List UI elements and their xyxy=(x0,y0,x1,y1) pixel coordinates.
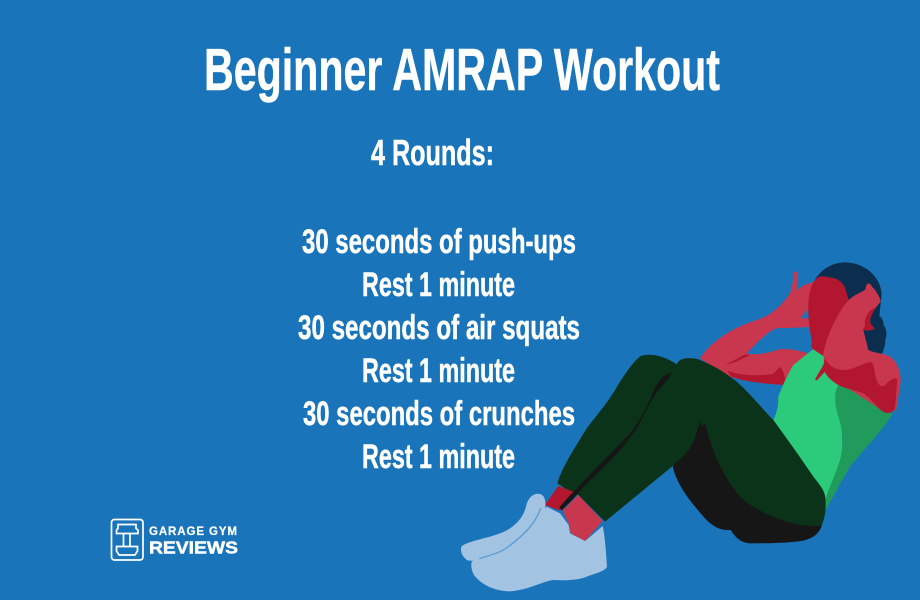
front arm xyxy=(823,283,901,413)
front arm shadow xyxy=(815,358,897,413)
step: air squats: 30 seconds of air squats xyxy=(298,309,580,347)
shoe fold xyxy=(479,508,541,559)
step: crunches: 30 seconds of crunches xyxy=(303,395,575,433)
near ankle cuff xyxy=(563,495,603,541)
near shoe xyxy=(471,507,607,591)
gap between hand and head xyxy=(801,309,809,319)
hair xyxy=(815,262,886,354)
pants xyxy=(557,355,826,526)
logo wordmark: bottom line: REVIEWS xyxy=(149,538,238,558)
far ankle cuff xyxy=(545,486,574,511)
step: push-ups: 30 seconds of push-ups xyxy=(302,223,576,261)
step: rest: Rest 1 minute xyxy=(362,352,515,390)
step: rest: Rest 1 minute xyxy=(362,266,515,304)
shirt: light side xyxy=(773,349,843,499)
logo: Garage Gym Reviews xyxy=(112,520,238,560)
mouth xyxy=(862,307,876,331)
illustration: person doing a crunch xyxy=(461,262,901,591)
shirt: shaded side xyxy=(826,385,893,509)
raised forearm: dark xyxy=(808,276,849,356)
back arm shadow xyxy=(725,354,785,385)
shorts xyxy=(673,422,822,543)
logo icon: dumbbell xyxy=(112,520,143,560)
back arm xyxy=(700,272,817,385)
rounds heading: 4 Rounds: xyxy=(371,132,494,173)
pant seam xyxy=(559,373,671,511)
workout text block xyxy=(298,132,580,476)
far shoe xyxy=(461,494,545,561)
step: rest: Rest 1 minute xyxy=(362,438,515,476)
logo wordmark: top line: GARAGE GYM xyxy=(149,526,237,538)
